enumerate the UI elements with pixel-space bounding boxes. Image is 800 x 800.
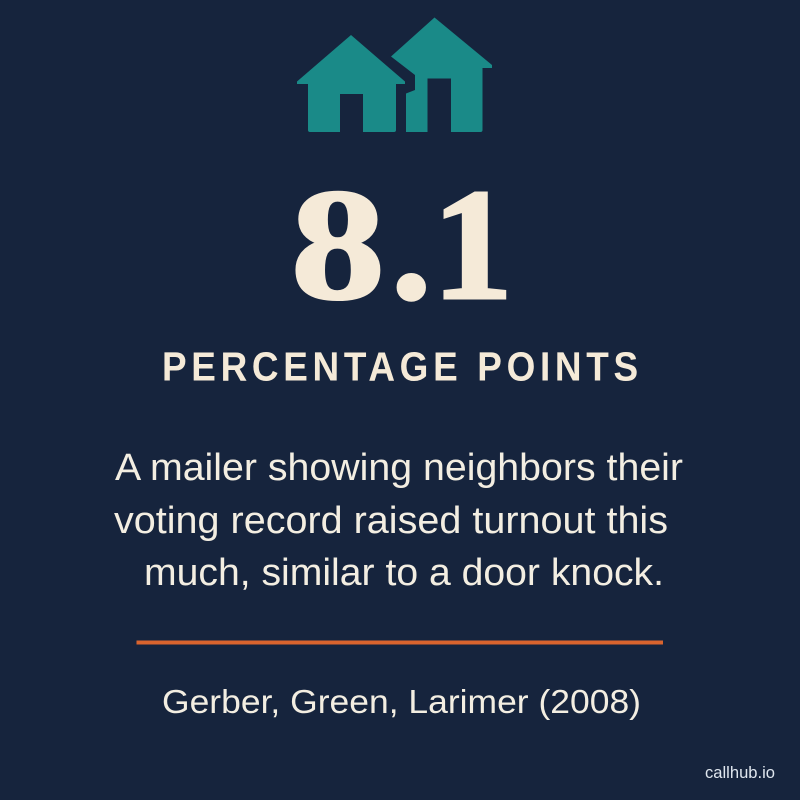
big number: 1 bbox=[432, 156, 513, 333]
description text: much, similar to a door knock. bbox=[144, 552, 664, 594]
description text bbox=[114, 447, 683, 594]
big number bbox=[291, 156, 513, 333]
big number: 8 bbox=[291, 156, 385, 333]
subheading: PERCENTAGE POINTS bbox=[162, 345, 638, 390]
big number: . bbox=[391, 156, 432, 333]
source citation: Gerber, Green, Larimer (2008) bbox=[162, 684, 641, 721]
watermark: callhub.io bbox=[705, 764, 775, 782]
description text: A mailer showing neighbors their bbox=[115, 447, 683, 489]
icon: two neighboring houses bbox=[297, 18, 492, 132]
description text: voting record raised turnout this bbox=[114, 500, 668, 542]
divider line bbox=[136, 640, 663, 644]
